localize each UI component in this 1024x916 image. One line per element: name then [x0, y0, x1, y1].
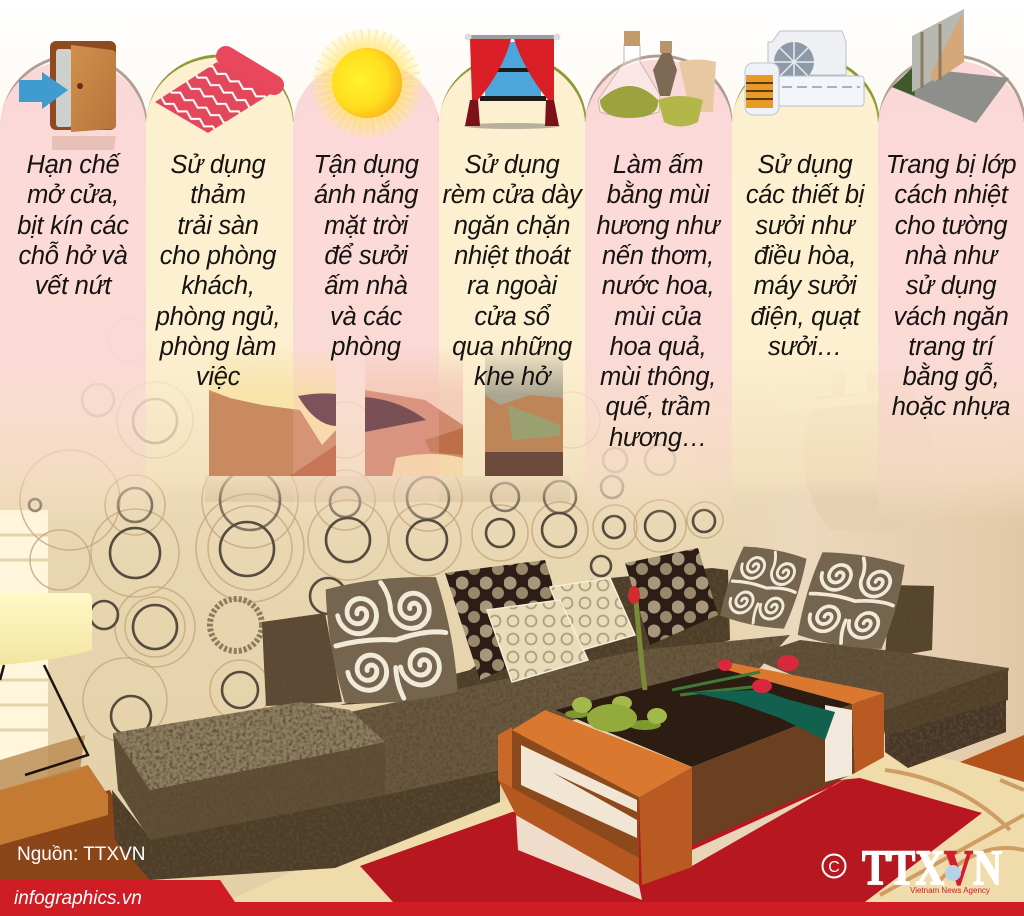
window blinds — [0, 510, 48, 790]
text: heaters: sưởi như — [755, 212, 857, 240]
copyright logo: C — [828, 859, 840, 876]
text: wall insulation: sử dụng — [906, 272, 996, 300]
icon: door — [19, 41, 116, 150]
icon: curtain — [464, 34, 560, 129]
text: heaters: máy sưởi — [754, 272, 858, 300]
sofa — [112, 543, 1009, 880]
text: curtain: rèm cửa dày — [442, 181, 584, 209]
text: door: Hạn chế — [27, 151, 122, 179]
text: door: bịt kín các — [17, 212, 129, 240]
panel 6: heaters — [732, 31, 878, 500]
rug right pattern — [880, 770, 1024, 895]
text: heaters: điện, quạt — [750, 303, 861, 331]
text: curtain: qua những — [452, 333, 572, 361]
pillow: dark floral left — [445, 560, 570, 680]
text: scents: mùi thông, — [600, 363, 716, 391]
text: carpet: phòng làm — [159, 333, 276, 361]
text: wall insulation: vách ngăn — [894, 303, 1009, 331]
text: wall insulation: bằng gỗ, — [903, 362, 999, 391]
text: scents: nước hoa, — [602, 272, 714, 300]
text: wall insulation: Trang bị lớp — [886, 151, 1016, 179]
text: curtain: nhiệt thoát — [454, 242, 571, 270]
text: sun: và các — [330, 303, 402, 331]
painting fragment left — [209, 355, 293, 476]
wood floor right — [960, 735, 1024, 782]
tulips and leaves — [628, 586, 835, 740]
glass top — [555, 668, 852, 767]
text: carpet: Sử dụng — [171, 151, 266, 179]
text: wall insulation: hoặc nhựa — [892, 393, 1010, 421]
text: heaters: điều hòa, — [754, 242, 856, 270]
back cushion right — [885, 585, 934, 658]
panel 5: scents — [585, 31, 732, 520]
band under painting — [205, 476, 570, 502]
text: scents: Làm ấm — [613, 151, 703, 179]
text: wall insulation: cách nhiệt — [894, 181, 1009, 209]
cream patterned rug — [225, 745, 1024, 902]
back cushion left — [262, 613, 342, 706]
text: door: chỗ hở và — [18, 241, 128, 270]
text: sun: mặt trời — [324, 212, 410, 240]
panel 7: wall insulation — [878, 9, 1024, 520]
side table and lamp — [0, 593, 108, 845]
seat left top — [113, 702, 385, 790]
pillow: dark floral right — [625, 548, 718, 645]
seat long — [350, 635, 790, 800]
text: heaters: Sử dụng — [758, 151, 853, 179]
text: sun: ánh nắng — [314, 180, 418, 209]
painting fragment centre — [293, 354, 439, 476]
back row — [340, 568, 730, 705]
text: carpet: thảm — [190, 181, 246, 209]
icon: sun — [311, 27, 423, 139]
text: sun: phòng — [330, 333, 401, 361]
text: carpet: việc — [196, 363, 241, 391]
floor stripe — [0, 902, 1024, 916]
icon: air conditioner and heater — [745, 31, 864, 115]
text: sun: Tận dụng — [313, 151, 419, 179]
lamp stand — [0, 665, 88, 775]
pillow: cream back — [550, 578, 635, 652]
panel 3: sun — [293, 28, 440, 514]
text: curtain: ra ngoài — [467, 272, 559, 300]
wood right — [720, 663, 884, 704]
text: scents: hương… — [609, 424, 707, 452]
chaise base — [885, 700, 1006, 768]
wall shelf and vase — [773, 368, 933, 530]
text: wall insulation: cho tường — [895, 212, 1007, 240]
text: heaters: sưởi… — [768, 333, 842, 361]
red carpet — [360, 778, 982, 902]
text: curtain: Sử dụng — [465, 151, 560, 179]
lamp shade — [0, 593, 92, 665]
seat left front — [113, 733, 385, 840]
chaise front — [880, 668, 1008, 735]
website label: infographics.vn — [14, 888, 142, 909]
wood front left — [639, 767, 692, 885]
text: scents: bằng mùi — [607, 180, 711, 209]
wallpaper circles — [20, 318, 723, 742]
panel 2: carpet — [146, 46, 294, 498]
text: carpet: khách, — [181, 272, 255, 300]
panel 4: curtain — [439, 34, 586, 498]
text: scents: nến thơm, — [602, 242, 714, 270]
wood floor — [0, 790, 150, 880]
text: carpet: trải sàn — [177, 212, 259, 240]
text: scents: mùi của — [614, 303, 702, 331]
icon: carpet — [155, 56, 274, 133]
wood top left — [512, 710, 692, 797]
text: scents: quế, trầm — [605, 393, 711, 421]
text: scents: hoa quả, — [610, 333, 706, 361]
painting fragment right — [439, 350, 563, 476]
text: carpet: phòng ngủ, — [155, 303, 280, 331]
pillow: swirl far right — [794, 548, 909, 653]
pillow: swirl left — [320, 573, 462, 707]
coffee table — [498, 586, 884, 900]
text: sun: để sưởi — [324, 242, 409, 270]
table underside — [516, 815, 642, 900]
pillow: swirl right — [717, 543, 810, 632]
text: heaters: các thiết bị — [746, 181, 866, 209]
text: curtain: ngăn chặn — [454, 212, 570, 240]
footer red tab — [0, 880, 235, 916]
chaise top — [749, 640, 1009, 712]
text: carpet: cho phòng — [160, 242, 276, 270]
seat base front — [112, 770, 500, 880]
text: curtain: khe hở — [474, 363, 553, 391]
text: wall insulation: trang trí — [908, 333, 997, 361]
text: wall insulation: nhà như — [905, 242, 999, 270]
text: door: vết nứt — [35, 272, 112, 300]
icon: insulated wall — [892, 9, 1009, 123]
pillow: cream front — [487, 600, 588, 682]
panel 1: door — [0, 41, 146, 520]
copyright logo: TTXVN — [862, 839, 1002, 895]
icon: bottles and candles — [598, 31, 716, 126]
copyright logo: Vietnam News Agency — [910, 886, 990, 895]
tea set — [565, 696, 667, 732]
source credit: Nguồn: TTXVN — [17, 844, 145, 865]
open shelf — [512, 730, 639, 885]
glass lower — [692, 704, 855, 845]
text: scents: hương như — [596, 212, 722, 240]
text: curtain: cửa sổ — [474, 303, 552, 331]
text: door: mở cửa, — [27, 181, 119, 209]
text: sun: ấm nhà — [324, 272, 408, 300]
